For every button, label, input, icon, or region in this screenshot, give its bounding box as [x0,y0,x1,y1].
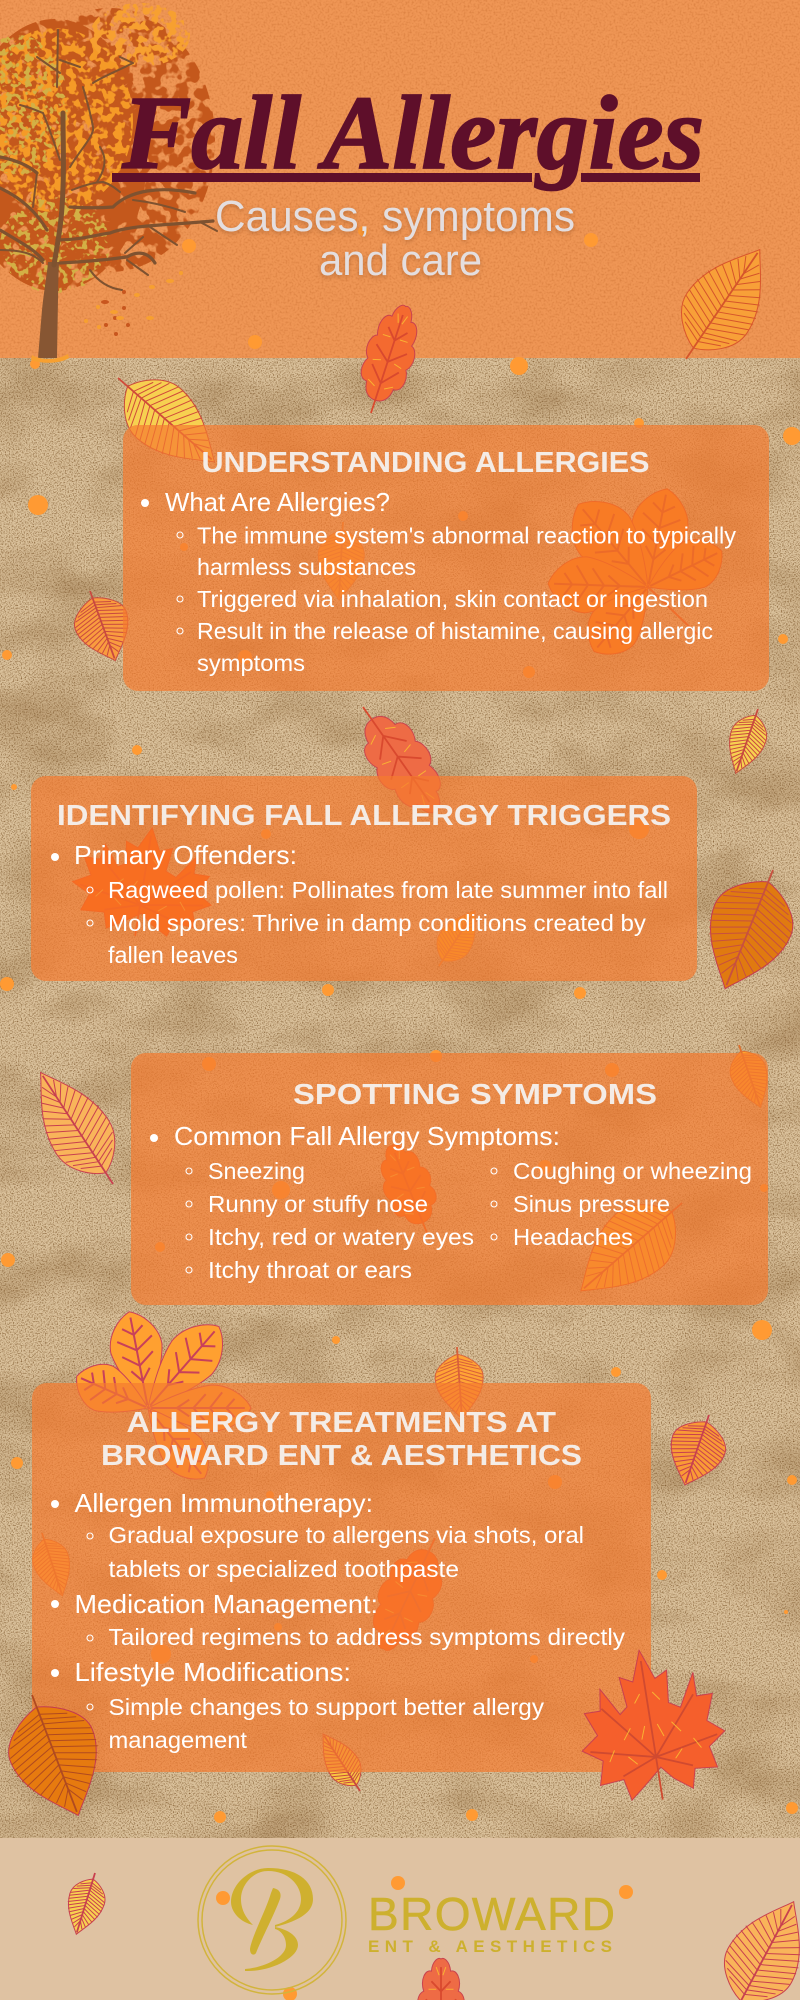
bullet list: Triggered via inhalation, skin contact or ingestion [197,586,708,612]
section: understanding allergies text [141,447,737,676]
footer band background [0,1838,800,2000]
section: spotting symptoms text [150,1079,752,1283]
treatment list: Gradual exposure to allergens via shots, oral [108,1522,584,1548]
logo emblem [198,1846,346,1994]
heading [101,1407,582,1472]
leaf: big orange right of second panel [687,855,800,1004]
bullet list: Mold spores: Thrive in damp conditions created by [108,910,647,936]
symptom list: Itchy throat or ears [208,1257,412,1283]
header band background [0,0,800,358]
leaf: top right of third panel [722,1039,778,1113]
leaf: top of fourth panel [433,1345,486,1420]
symptom list: Sinus pressure [513,1191,670,1217]
logo: Broward ENT and Aesthetics [198,1846,615,1994]
leaf: oak between panels [340,691,459,827]
subtitle: Causes, symptoms [215,192,575,241]
treatment list [51,1488,626,1753]
symptom list [150,1121,752,1283]
bullet list: What Are Allergies? [165,487,390,517]
bullet list: harmless substances [197,554,416,580]
panel: fall allergy triggers background [31,776,697,981]
heading: ALLERGY TREATMENTS AT [126,1407,556,1439]
leaf: maple bottom right [568,1639,734,1811]
symptom list: Itchy, red or watery eyes [208,1224,474,1250]
panel: spotting symptoms background [131,1053,768,1305]
leaf: header centre oak [348,298,429,421]
bullet list: Result in the release of histamine, causing allergic [197,618,713,644]
icon: autumn tree [0,3,217,363]
leaf: yellow near first panel [96,353,236,487]
subtitle [215,192,575,285]
leaf: left of third panel [15,1056,139,1201]
section: treatments text [51,1407,626,1753]
bullet list: symptoms [197,650,305,676]
leaf: large orange bottom left [0,1679,119,1831]
leaf: faint inside second panel [425,901,489,975]
treatment list: tablets or specialized toothpaste [108,1556,459,1582]
heading: IDENTIFYING FALL ALLERGY TRIGGERS [57,800,671,832]
heading: BROWARD ENT & AESTHETICS [101,1440,582,1472]
leaf: right of fourth panel [659,1406,735,1494]
leaf: small yellow at fourth panel bottom [310,1725,373,1800]
symptom list: Runny or stuffy nose [208,1191,428,1217]
title: Fall Allergies: Fall Allergies [121,74,704,191]
heading: SPOTTING SYMPTOMS [293,1079,657,1111]
leaf: faint inside first panel [316,521,366,601]
leaf: maple inside second panel [66,817,222,947]
logo wordmark: ENT & AESTHETICS [368,1937,612,1956]
bullet list [141,487,737,676]
symptom list: Common Fall Allergy Symptoms: [174,1121,560,1151]
subtitle: and care [319,236,482,285]
symptom list: Coughing or wheezing [513,1158,752,1184]
treatment list: Allergen Immunotherapy: [74,1488,373,1518]
leaf: header right orange [656,229,790,379]
leaf: chestnut above fourth panel [67,1307,251,1492]
leaf: footer small yellow [59,1868,112,1939]
leaf: footer oak [418,1958,464,2000]
leaf: small yellow right [719,703,775,779]
leaf: chestnut inside first panel [547,483,733,668]
treatment list: Medication Management: [74,1589,378,1619]
treatment list: Simple changes to support better allergy [108,1694,545,1720]
treatment list: management [108,1727,248,1753]
leaf: large yellow in third panel [558,1177,705,1317]
leaf: oak inside third panel [369,1136,450,1242]
leaf: oak inside fourth panel [358,1526,461,1661]
leaf: small left in fourth panel [25,1527,80,1601]
section: fall allergy triggers text [51,800,671,968]
treatment list: Lifestyle Modifications: [74,1657,351,1687]
treatment list: Tailored regimens to address symptoms directly [108,1624,626,1650]
bullet list: The immune system's abnormal reaction to typically [197,522,737,548]
sand textured background [0,358,800,1838]
bullet list: Primary Offenders: [74,840,297,870]
logo wordmark: BROWARD [368,1888,615,1940]
bullet list [51,840,668,968]
symptom list: Sneezing [208,1158,305,1184]
panel: understanding allergies background [123,425,769,691]
panel: treatments background [32,1383,651,1772]
bullet list: Ragweed pollen: Pollinates from late summer into fall [108,877,668,903]
heading: UNDERSTANDING ALLERGIES [202,447,650,479]
symptom list: Headaches [513,1224,633,1250]
leaf: small left of first panel [65,582,141,670]
leaf: footer right [703,1885,800,2000]
bullet list: fallen leaves [108,942,238,968]
